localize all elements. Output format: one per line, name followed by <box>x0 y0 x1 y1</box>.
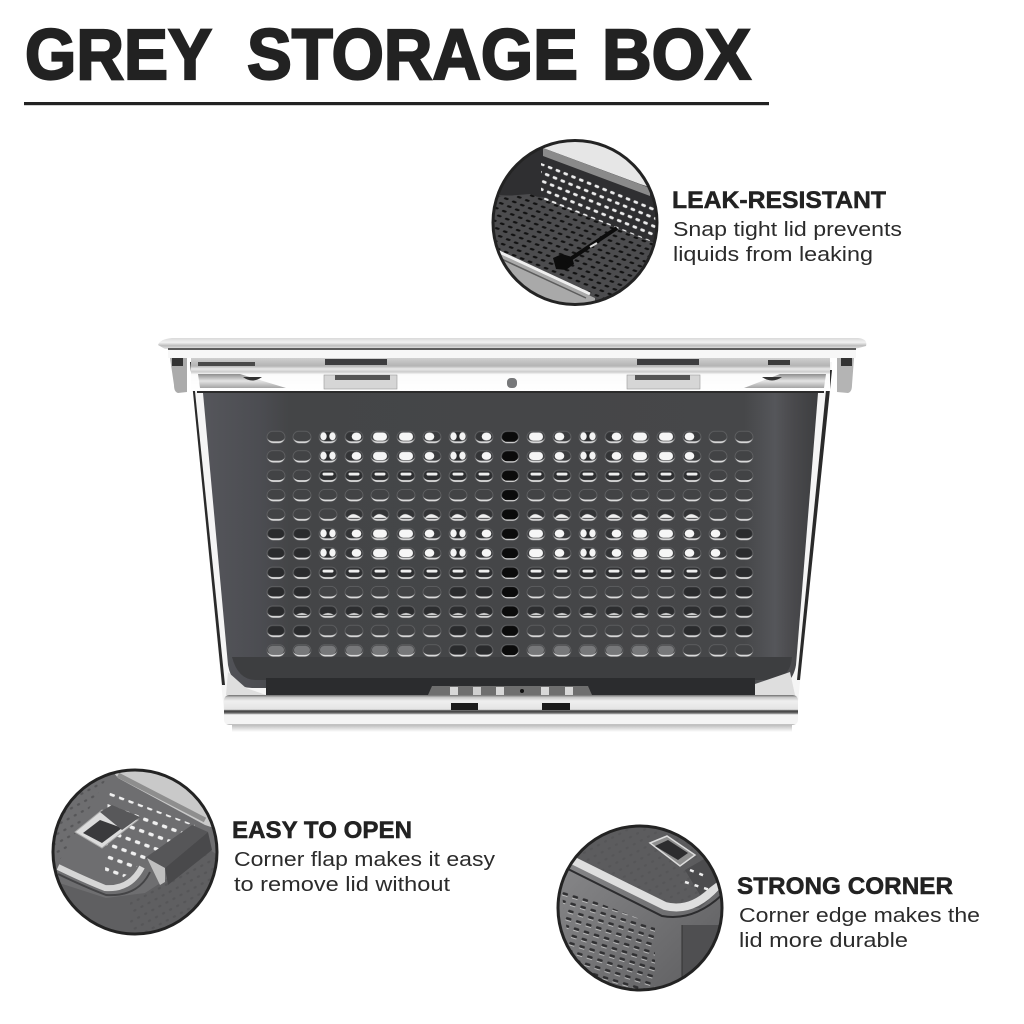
basket bottom band <box>232 657 792 680</box>
title: BOX <box>602 16 751 95</box>
title <box>24 16 769 105</box>
base notch left <box>451 703 478 710</box>
corner reflection left <box>226 672 266 695</box>
foot vents <box>428 686 592 695</box>
left clear wall <box>190 362 225 685</box>
icon: corner edge detail <box>555 823 725 995</box>
description: Snap tight lid prevents <box>673 219 902 241</box>
latch right <box>627 359 700 389</box>
description: lid more durable <box>739 930 908 952</box>
grey basket panel <box>203 393 818 688</box>
base lip <box>224 695 798 725</box>
clear outer container <box>190 362 832 725</box>
stripe rows <box>315 466 497 486</box>
corner reflection right <box>755 672 795 695</box>
right corner clip <box>837 358 854 393</box>
bright rows 1-2 <box>315 427 341 466</box>
centre black column <box>497 427 523 660</box>
icon: basket drain detail <box>490 135 665 310</box>
callout: leak-resistant <box>490 135 902 310</box>
bright rows 6-7 <box>315 524 341 563</box>
lid <box>158 338 866 349</box>
description <box>739 905 980 952</box>
description: Corner edge makes the <box>739 905 980 927</box>
shadow under box <box>232 725 792 732</box>
icon: corner flap detail <box>50 768 225 940</box>
description: to remove lid without <box>234 874 451 896</box>
title: STORAGE <box>247 16 578 95</box>
left corner clip <box>170 358 187 393</box>
heading: LEAK-RESISTANT <box>672 187 886 214</box>
heading: EASY TO OPEN <box>232 817 412 844</box>
heading: STRONG CORNER <box>737 873 953 900</box>
callout: easy to open <box>50 768 495 940</box>
rim <box>191 358 830 391</box>
right clear wall <box>797 370 832 680</box>
description <box>673 219 902 266</box>
description: liquids from leaking <box>673 244 873 266</box>
callout: strong corner <box>555 823 980 995</box>
basket foot <box>266 678 755 695</box>
product image: storage box front view <box>158 338 866 732</box>
description: Corner flap makes it easy <box>234 849 495 871</box>
latch left <box>324 359 397 389</box>
hinge right <box>744 360 826 388</box>
hinge left <box>198 362 286 388</box>
title: GREY <box>25 16 212 95</box>
description <box>234 849 495 896</box>
base notch right <box>542 703 570 710</box>
perforation holes <box>263 427 757 660</box>
centre pin <box>507 378 517 388</box>
grey row <box>263 641 419 660</box>
